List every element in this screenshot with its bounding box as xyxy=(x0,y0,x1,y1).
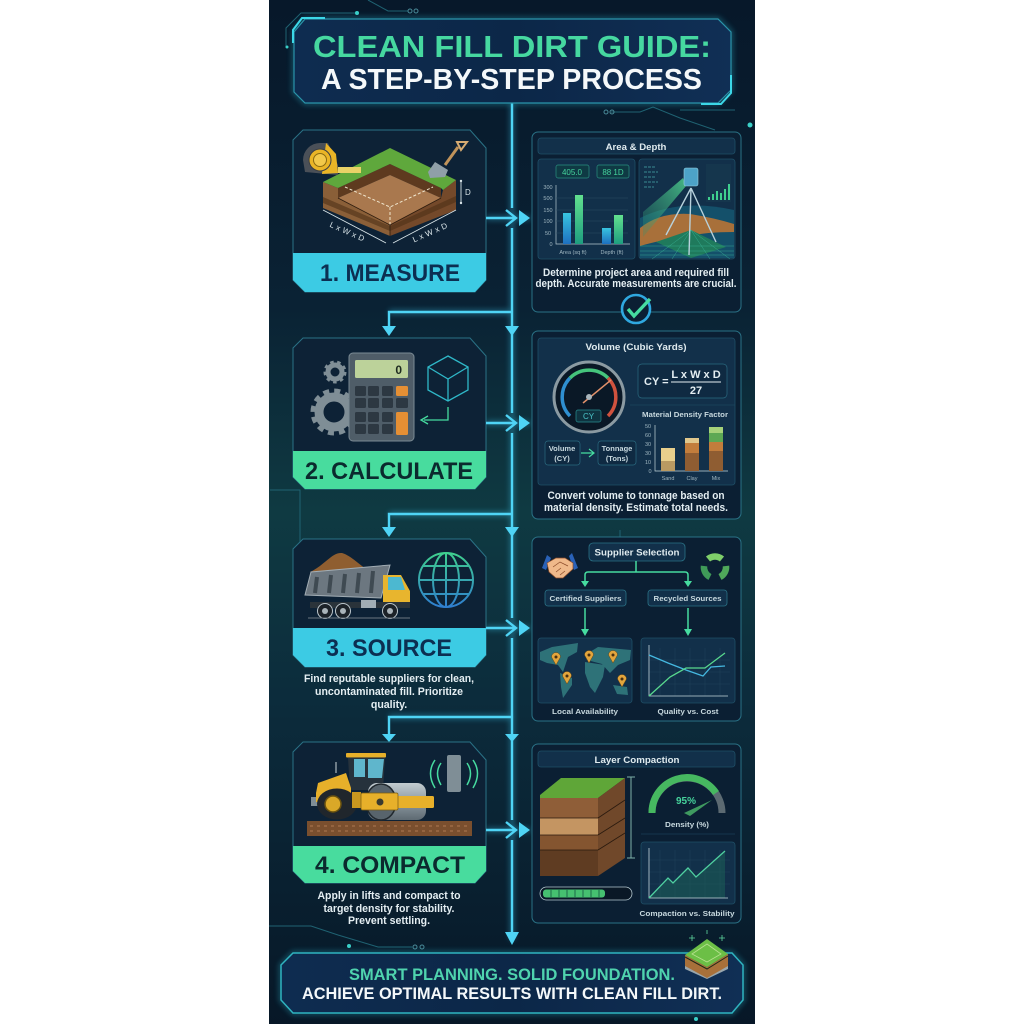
formula: L x W x D xyxy=(671,369,721,381)
bar chart: 0 xyxy=(549,242,553,248)
panel: area and depth: Area & Depth xyxy=(606,142,667,153)
header: Volume (Cubic Yards) xyxy=(586,342,686,353)
panel: step 1 measure xyxy=(293,130,486,292)
step 3 description: quality. xyxy=(371,699,407,711)
description: Determine project area and required fill xyxy=(543,267,729,279)
density bar chart: 50 xyxy=(645,424,651,430)
panel: step 3 source xyxy=(293,539,486,667)
banner xyxy=(293,846,486,883)
circuit decoration xyxy=(269,0,752,1021)
icon: calculator xyxy=(349,353,414,441)
step 4 description: Apply in lifts and compact to xyxy=(318,890,461,902)
density bar chart: 30 xyxy=(645,451,651,457)
icon: globe xyxy=(419,553,473,607)
icon: dirt pit xyxy=(323,148,456,236)
density bar chart: 10 xyxy=(645,460,651,466)
density bar chart: 60 xyxy=(645,433,651,439)
dimension labels: D xyxy=(465,188,471,197)
arrow: step 4 to details xyxy=(486,822,530,838)
step 3 description: Find reputable suppliers for clean, xyxy=(304,673,474,685)
footer line 2: ACHIEVE OPTIMAL RESULTS WITH CLEAN FILL DIRT. xyxy=(302,984,722,1003)
icon: tape measure xyxy=(303,143,361,175)
volume to tonnage flow xyxy=(545,441,636,465)
density bar chart: Clay xyxy=(686,476,698,482)
icon: handshake xyxy=(542,553,578,578)
header xyxy=(538,751,735,767)
density bar chart: Sand xyxy=(662,476,674,482)
main flow line glow xyxy=(389,103,530,940)
description: Convert volume to tonnage based on xyxy=(548,490,724,502)
formula: 27 xyxy=(690,385,702,397)
density bar chart: Material Density Factor xyxy=(642,410,728,419)
volume to tonnage flow: (CY) xyxy=(554,454,570,463)
title line 1: CLEAN FILL DIRT GUIDE: xyxy=(313,29,711,64)
bar chart: 500 xyxy=(543,196,553,202)
formula xyxy=(638,364,727,398)
panel: layer compaction: Layer Compaction xyxy=(594,755,680,766)
line chart: quality vs cost: Quality vs. Cost xyxy=(658,707,719,716)
map: local availability xyxy=(538,638,632,716)
density gauge: 95% xyxy=(676,796,696,807)
step 3 description xyxy=(304,673,474,711)
icon: calculator: 0 xyxy=(395,363,402,377)
title panel xyxy=(293,18,731,104)
line chart: quality vs cost xyxy=(641,638,735,716)
panel: supplier selection: Supplier Selection xyxy=(594,548,680,558)
gauge xyxy=(554,362,624,432)
panel: supplier selection xyxy=(532,537,741,721)
icon: recycle xyxy=(704,556,726,577)
dimension labels xyxy=(323,180,471,244)
icon: dump truck xyxy=(305,553,410,618)
bar chart: 405.0 xyxy=(562,168,583,177)
arrow: step 3 to details xyxy=(486,620,530,636)
dimension labels: L x W x D xyxy=(328,220,366,243)
formula: CY = xyxy=(644,376,669,388)
volume to tonnage flow: (Tons) xyxy=(606,454,629,463)
panel: layer compaction xyxy=(532,744,741,923)
banner xyxy=(293,451,486,489)
gauge: CY xyxy=(583,412,595,421)
arrow: step 2 to details xyxy=(486,415,530,431)
icon: shovel xyxy=(428,142,467,178)
density gauge xyxy=(652,778,722,829)
panel: step 2 calculate xyxy=(293,338,486,489)
icon: gears xyxy=(313,362,355,433)
line chart: compaction vs stability: Compaction vs. Stability xyxy=(640,909,735,918)
step 4 description xyxy=(318,890,461,927)
option: certified suppliers: Certified Suppliers xyxy=(550,594,622,603)
progress bar xyxy=(540,887,632,900)
step label: 3. SOURCE xyxy=(326,635,452,662)
bar chart: 50 xyxy=(545,231,551,237)
step 4 description: Prevent settling. xyxy=(348,915,430,927)
header xyxy=(538,138,735,154)
panel: volume: material density. Estimate total needs. xyxy=(544,502,728,514)
step label: 2. CALCULATE xyxy=(305,458,473,485)
step label: 4. COMPACT xyxy=(315,852,465,879)
header xyxy=(589,543,685,561)
step 4 description: target density for stability. xyxy=(324,903,455,915)
arrow: step 1 to details xyxy=(486,210,530,226)
bar chart: Depth (ft) xyxy=(601,250,624,256)
bar chart: 100 xyxy=(543,219,553,225)
bar chart: 88 1D xyxy=(602,168,624,177)
volume to tonnage flow: Tonnage xyxy=(602,444,632,453)
density bar chart: 30 xyxy=(645,442,651,448)
option: recycled sources: Recycled Sources xyxy=(654,594,722,603)
option: certified suppliers xyxy=(545,590,626,606)
title line 2: A STEP-BY-STEP PROCESS xyxy=(321,64,702,96)
main flow line with arrows xyxy=(382,103,519,945)
flow connectors xyxy=(581,561,692,636)
density bar chart: 0 xyxy=(648,469,652,475)
dimension labels: L x W x D xyxy=(411,221,449,244)
icon: road roller xyxy=(307,753,472,836)
bar chart: 150 xyxy=(543,208,553,214)
soil layer block xyxy=(540,777,635,876)
icon: check badge xyxy=(622,295,650,323)
title panel glow xyxy=(294,19,731,103)
icon: wireframe cube xyxy=(421,356,468,424)
density bar chart xyxy=(642,410,728,482)
bar chart: 300 xyxy=(543,185,553,191)
banner xyxy=(293,253,486,292)
map: local availability: Local Availability xyxy=(552,707,619,716)
footer line 1: SMART PLANNING. SOLID FOUNDATION. xyxy=(349,965,675,984)
icon: soil cube xyxy=(685,930,728,979)
panel: step 4 compact xyxy=(293,742,486,883)
volume to tonnage flow: Volume xyxy=(549,444,575,453)
density bar chart: Mix xyxy=(712,476,721,482)
survey scanner illustration xyxy=(639,159,735,259)
icon: vibration sensor xyxy=(430,755,478,792)
banner xyxy=(293,628,486,667)
panel: volume xyxy=(532,331,741,519)
footer banner xyxy=(281,953,743,1013)
background xyxy=(269,0,755,1024)
bar chart: Area (sq ft) xyxy=(559,250,587,256)
step 3 description: uncontaminated fill. Prioritize xyxy=(315,686,463,698)
density gauge: Density (%) xyxy=(665,820,710,829)
panel: area and depth: depth. Accurate measurements are crucial. xyxy=(536,278,737,290)
option: recycled sources xyxy=(648,590,727,606)
step label: 1. MEASURE xyxy=(320,260,460,287)
footer banner glow xyxy=(281,953,743,1013)
bar chart xyxy=(538,159,635,259)
line chart: compaction vs stability xyxy=(640,842,735,918)
panel: area and depth xyxy=(532,132,741,312)
